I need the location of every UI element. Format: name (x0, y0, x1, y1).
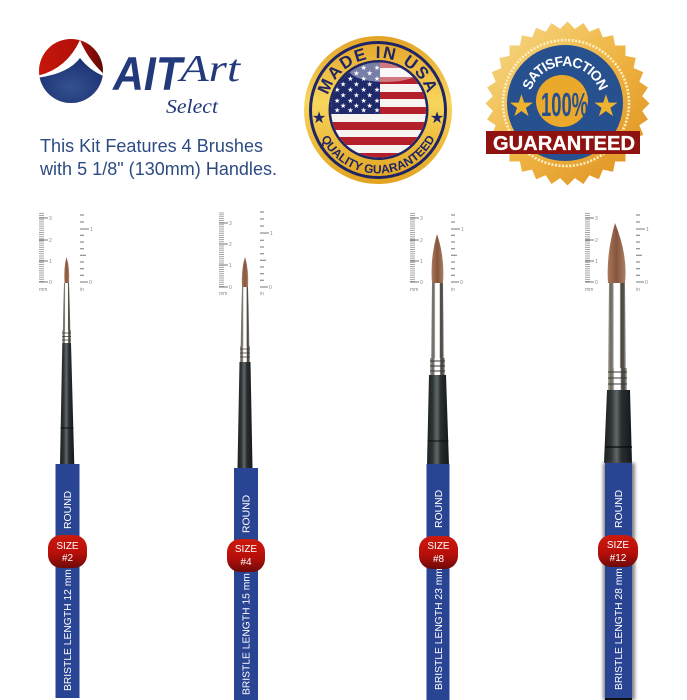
brush 1: size 2 (48, 257, 87, 698)
band text: Round: ROUND (242, 495, 252, 533)
ruler 4: mm (585, 287, 593, 293)
ruler 2: 0 (229, 285, 232, 291)
ruler 3: 3 (420, 216, 423, 222)
ruler 1: 0 (49, 280, 52, 286)
ruler 4 (585, 212, 649, 293)
ruler 4: 0 (595, 280, 598, 286)
ruler 2: 3 (229, 221, 232, 227)
logo wordmark Select: Select (166, 96, 218, 118)
seal stars: ★ (508, 89, 535, 124)
label band (426, 464, 450, 700)
flag: ★★★ (340, 80, 380, 88)
ruler 4: 1 (646, 227, 649, 233)
badge: 100% Satisfaction Guaranteed: ★ (593, 89, 619, 124)
ruler 3: 1 (420, 259, 423, 265)
band text: bristle length: BRISTLE LENGTH 23 mm (434, 568, 445, 690)
label band (234, 468, 258, 700)
logo wordmark AIT: AIT (112, 47, 186, 100)
size badge (48, 535, 87, 568)
ruler 1: in (80, 287, 84, 293)
logo wordmark Art: Art (176, 48, 242, 90)
flag: ★★★ (340, 92, 380, 100)
brush 2: size 4: #4 (240, 557, 252, 568)
ruler 2: 1 (270, 231, 273, 237)
badge: Made in USA: ★ (430, 108, 444, 127)
ruler 3: 2 (420, 238, 423, 244)
ruler 1: 1 (49, 259, 52, 265)
logo: AIT Art Select (36, 38, 242, 118)
kit description text: This Kit Features 4 Brushes (40, 136, 263, 156)
ruler 2: mm (219, 291, 227, 297)
ruler 3: 1 (461, 227, 464, 233)
label band (56, 464, 80, 698)
flag: ★★★★ (334, 97, 387, 105)
badge: 100% Satisfaction Guaranteed (486, 22, 650, 186)
badge: 100% Satisfaction Guaranteed: GUARANTEED (493, 132, 635, 155)
ruler 2 (219, 212, 273, 297)
brush 4: size 12 (598, 223, 638, 700)
brush 3: size 8 (419, 234, 458, 700)
flag (330, 58, 428, 159)
badge stars: ★ (312, 108, 326, 127)
ruler 1: 3 (49, 216, 52, 222)
brush 2: size 4: SIZE (235, 544, 257, 555)
size badge (419, 536, 458, 569)
band text: Round: ROUND (63, 491, 74, 529)
band text: bristle length: BRISTLE LENGTH 12 mm (63, 569, 74, 691)
band text: bristle length: BRISTLE LENGTH 28 mm (614, 568, 625, 690)
ruler 3: 0 (420, 280, 423, 286)
ruler 1: 0 (89, 280, 92, 286)
ruler 2: 1 (229, 263, 232, 269)
ruler 2: 0 (269, 285, 272, 291)
flag: ★★★★ (334, 75, 387, 83)
ruler 4: in (636, 287, 640, 293)
ruler 2: in (260, 291, 264, 297)
seal text: Satisfaction: SATISFACTION (523, 56, 608, 90)
ruler 1: 2 (49, 238, 52, 244)
ribbon: Guaranteed (486, 131, 640, 154)
ruler 4: 3 (595, 216, 598, 222)
brush 4: size 12: SIZE (607, 540, 629, 551)
brush 1: size 2: #2 (62, 553, 73, 564)
band shadow (603, 463, 635, 700)
brush 2: size 4 (227, 257, 265, 700)
ruler 4: 2 (595, 238, 598, 244)
brush 3: size 8: #8 (433, 554, 444, 565)
ruler 3: in (451, 287, 455, 293)
band text: bristle length: BRISTLE LENGTH 15 mm (242, 573, 252, 695)
badge text: Made in USA: MADE IN USA (317, 46, 436, 94)
brush 4: size 12: #12 (610, 553, 627, 564)
ruler 2: 2 (229, 242, 232, 248)
ruler 4: 1 (595, 259, 598, 265)
badge: Made in USA (304, 36, 452, 184)
band text: Round: ROUND (434, 490, 445, 528)
seal text: 100%: 100% (541, 86, 588, 123)
size badge (598, 535, 638, 567)
icon: logo globe (39, 39, 103, 103)
ruler 3: mm (410, 287, 418, 293)
flag: ★★★ (340, 102, 380, 110)
ruler 1: mm (39, 287, 47, 293)
ruler 3 (410, 212, 464, 293)
kit description text: with 5 1/8" (130mm) Handles. (39, 159, 277, 179)
flag: ★★★★ (334, 106, 387, 114)
flag: ★★★★ (334, 86, 387, 94)
ruler 1: 1 (90, 227, 93, 233)
band text: Round: ROUND (614, 490, 625, 528)
size badge (227, 539, 265, 572)
label band (605, 463, 632, 698)
ruler 4: 0 (645, 280, 648, 286)
badge text: Quality Guaranteed: QUALITY GUARANTEED (322, 136, 434, 174)
brush 3: size 8: SIZE (427, 541, 450, 552)
ruler 1 (39, 212, 93, 293)
brush 1: size 2: SIZE (56, 541, 79, 552)
flag: ★★★★ (334, 64, 387, 72)
ruler 3: 0 (460, 280, 463, 286)
flag: ★★★ (340, 70, 380, 78)
